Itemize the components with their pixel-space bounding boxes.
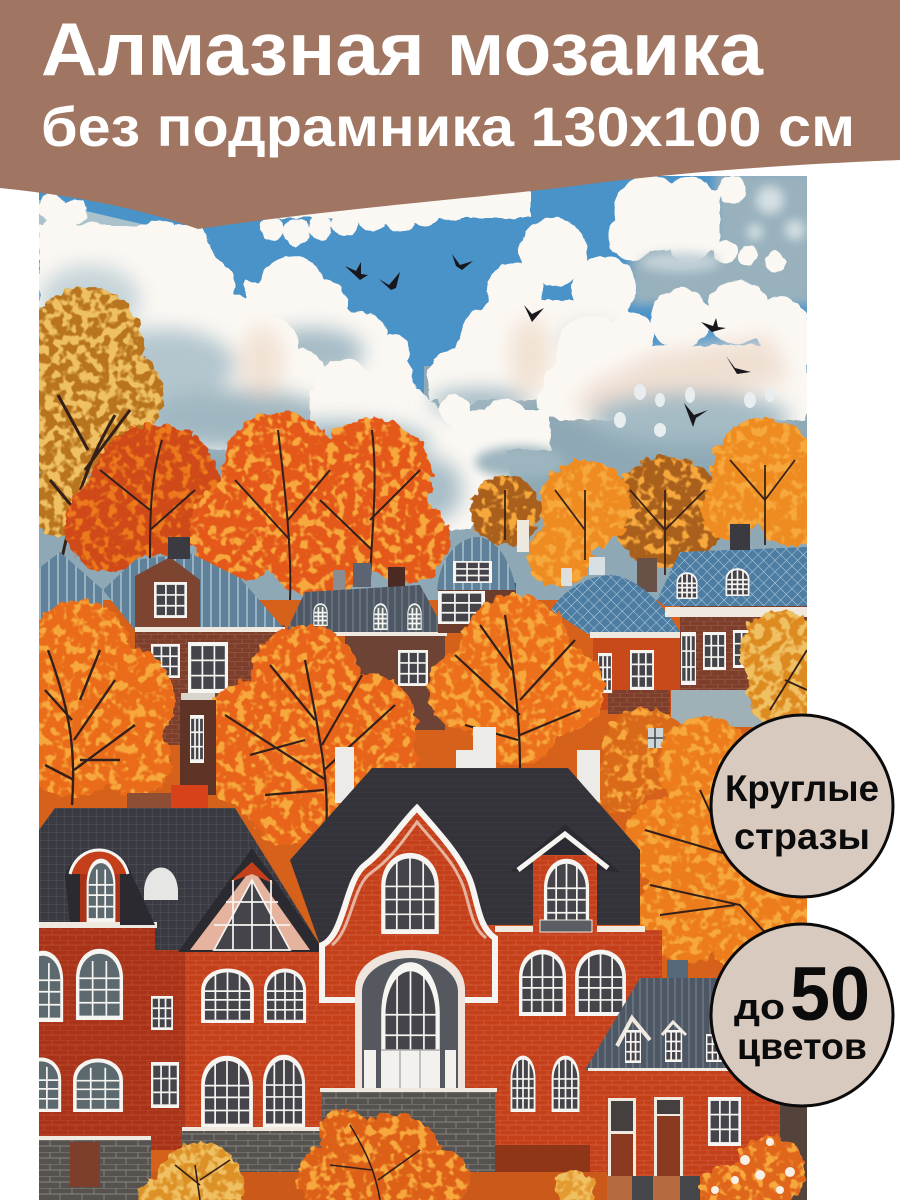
doors bbox=[608, 1097, 683, 1176]
tree: orange group bbox=[64, 412, 449, 600]
title: Алмазная мозаика bbox=[41, 7, 764, 91]
sky bbox=[39, 176, 807, 600]
house: dark mansard bbox=[287, 563, 447, 730]
cloud: right lower bbox=[536, 280, 822, 444]
right dormer bbox=[510, 824, 620, 933]
front house bbox=[21, 700, 662, 1200]
stone base bbox=[39, 1088, 497, 1200]
cloud: right top bbox=[608, 176, 805, 272]
badge: round rhinestones: стразы bbox=[734, 816, 870, 857]
birds bbox=[345, 254, 751, 427]
badge: round rhinestones bbox=[711, 715, 893, 897]
fan window bbox=[144, 868, 178, 900]
cornices bbox=[39, 922, 645, 1140]
back trees bbox=[12, 287, 828, 600]
badge: up to 50 colours: цветов bbox=[737, 1026, 867, 1067]
tree: mid centre bbox=[205, 625, 417, 845]
tree: yellow right edge bbox=[739, 610, 807, 722]
tree: big right bbox=[624, 716, 807, 964]
orange backdrop bbox=[39, 600, 807, 1200]
badge: up to 50 colours bbox=[711, 924, 893, 1106]
subtitle: без подрамника 130х100 см bbox=[41, 95, 855, 158]
cloud: top bbox=[39, 191, 531, 248]
brick walls bbox=[39, 910, 662, 1175]
cloud: middle tower bbox=[428, 218, 640, 415]
triangular gable bbox=[178, 848, 325, 952]
steps bbox=[607, 1176, 700, 1200]
badge: up to 50 colours: 50 bbox=[790, 952, 870, 1037]
painting bbox=[4, 170, 828, 1200]
tree: mid left bbox=[39, 598, 176, 806]
tree: foreground orange bbox=[298, 1109, 470, 1200]
badge: round rhinestones: Круглые bbox=[725, 768, 879, 809]
tree: mid background right bbox=[470, 418, 828, 587]
cloud: third hump bbox=[310, 358, 510, 531]
tree: mid right bbox=[428, 595, 605, 768]
house: blue dome bbox=[551, 557, 681, 714]
mid trees bbox=[4, 595, 825, 970]
chimneys bbox=[127, 700, 600, 808]
left dormer bbox=[65, 850, 155, 925]
cloud: bottom hump bbox=[440, 395, 552, 452]
tree: small behind bbox=[598, 706, 681, 814]
foreground trees bbox=[137, 1109, 806, 1200]
tree: foreground yellow bbox=[137, 1142, 244, 1200]
entrance door bbox=[355, 950, 465, 1090]
header banner bbox=[0, 0, 900, 229]
window row one bbox=[23, 949, 626, 1030]
roof: left bbox=[39, 808, 320, 950]
roof: centre bbox=[290, 768, 640, 945]
central gable bbox=[322, 808, 495, 1000]
tree: foreground right bbox=[701, 1136, 806, 1200]
tree: left yellow bbox=[39, 286, 164, 556]
tree: small yellow lower right bbox=[555, 1170, 595, 1200]
house: far right bbox=[657, 524, 807, 727]
small house bbox=[585, 960, 807, 1200]
houses: second row bbox=[39, 520, 807, 763]
cloud: second hump bbox=[244, 256, 413, 378]
cloud: left main bbox=[39, 214, 335, 450]
clouds bbox=[38, 176, 822, 530]
badge: up to 50 colours: до bbox=[734, 986, 785, 1027]
window row two bbox=[21, 1055, 579, 1128]
house: far left blue roof bbox=[39, 537, 285, 763]
house: white domed tower bbox=[437, 520, 529, 633]
